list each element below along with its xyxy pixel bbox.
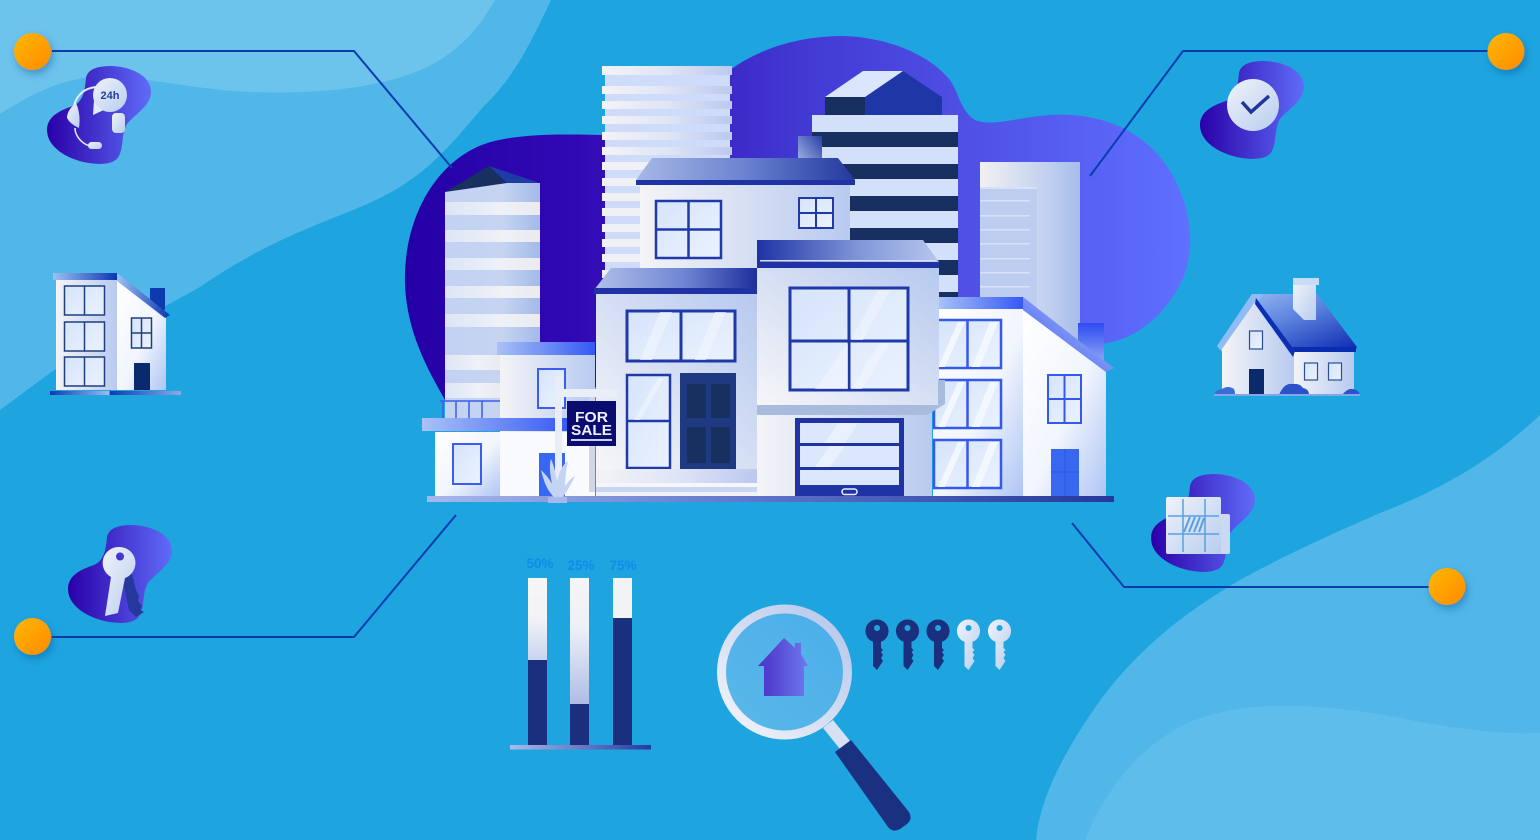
house: front center house	[594, 268, 757, 496]
key 4	[957, 619, 980, 670]
key 1	[865, 619, 889, 670]
central blob backdrop	[405, 36, 1190, 400]
chart labels	[526, 556, 637, 573]
connector line: top right	[1090, 51, 1488, 176]
chart labels: 75%	[609, 558, 637, 573]
ground strip	[427, 496, 1114, 502]
icon: check mark	[1200, 61, 1304, 159]
house: upper main house	[636, 136, 855, 275]
orange dot: top left	[14, 33, 51, 70]
connector line: bottom left	[52, 515, 456, 637]
orange dot: bottom right	[1428, 568, 1466, 605]
icon: keys	[68, 525, 172, 623]
bar 50%	[528, 578, 547, 746]
background wave: top left outer	[0, 0, 551, 410]
chart labels: 50%	[526, 556, 554, 571]
row of keys	[865, 619, 1011, 670]
house: front right house with garage	[757, 240, 945, 496]
icon: 24h headset support	[47, 66, 151, 164]
icon: 24h headset support: 24h	[101, 90, 120, 102]
icon: house in lens	[758, 638, 808, 696]
icon: floor plan	[1151, 474, 1255, 572]
bar 75%	[613, 578, 632, 746]
tower: striped back tower	[602, 66, 732, 306]
bar 25%	[570, 578, 589, 746]
for sale sign: FOR	[575, 409, 608, 426]
connector line: top left	[52, 51, 452, 168]
key 5	[988, 619, 1011, 670]
for sale sign: SALE	[571, 422, 612, 439]
chart: stacked bars	[510, 556, 651, 750]
connector line: bottom right	[1072, 523, 1430, 587]
orange dot: top right	[1488, 33, 1524, 70]
chart base	[510, 745, 651, 750]
house: right gabled house	[933, 297, 1114, 497]
tower: left tower with pyramid roof	[445, 166, 540, 420]
magnifying glass	[722, 609, 911, 831]
orange dot: bottom left	[14, 618, 51, 655]
background wave: bottom right inner	[1085, 706, 1540, 840]
for sale sign	[541, 376, 617, 503]
chart labels: 25%	[567, 558, 595, 573]
house: small left house	[422, 342, 595, 496]
background wave: bottom right outer	[1036, 415, 1540, 840]
background wave: top left inner	[0, 0, 495, 114]
key 3	[926, 619, 950, 670]
key 2	[896, 619, 919, 670]
tower: pale right tower	[980, 162, 1080, 342]
tower: navy striped tower	[812, 71, 958, 315]
icon: small apartment house	[50, 273, 181, 395]
icon: suburban house	[1214, 278, 1360, 396]
